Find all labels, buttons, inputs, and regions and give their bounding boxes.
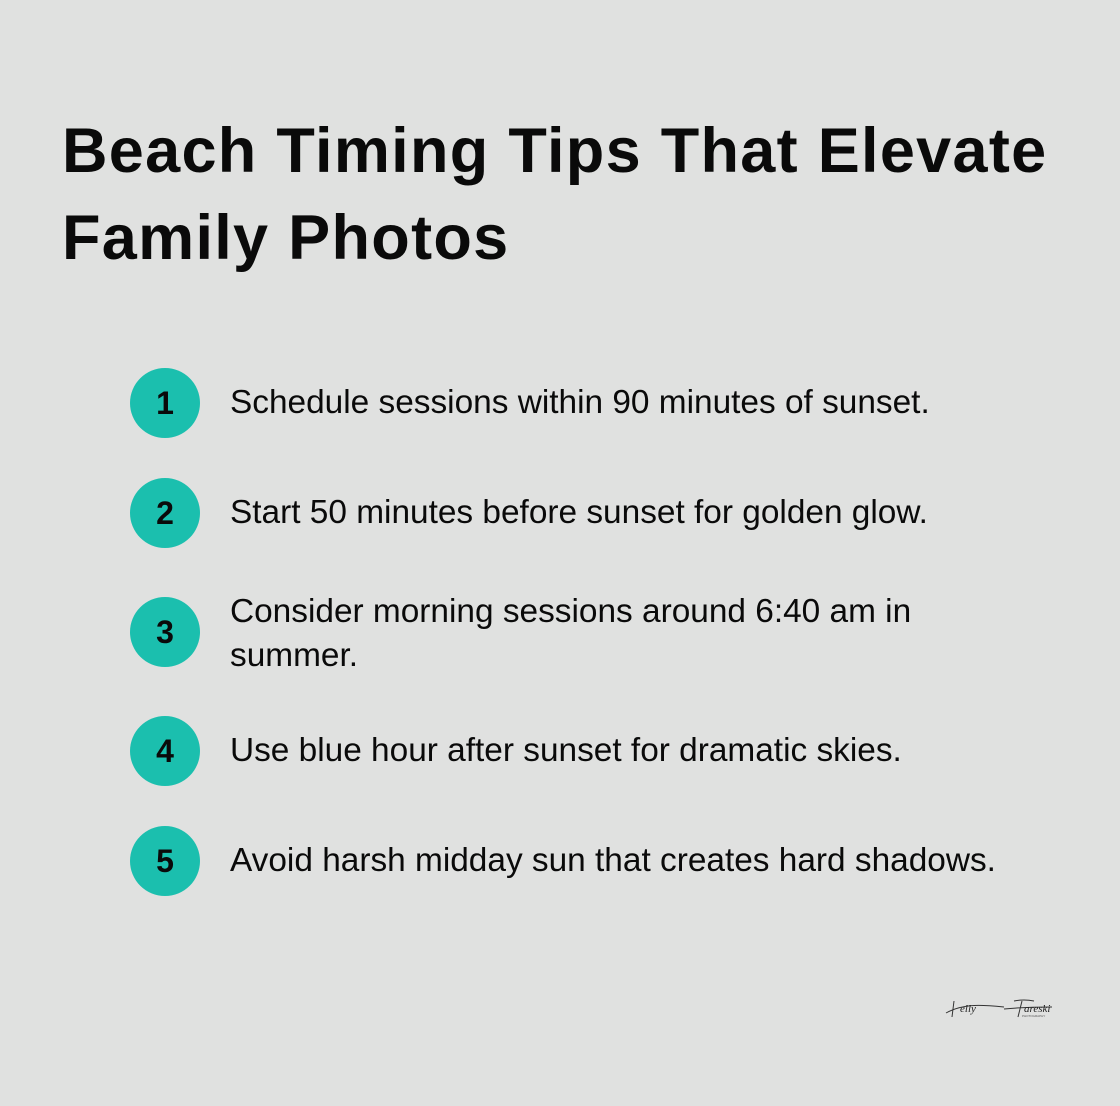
text 3: summer. — [230, 637, 358, 674]
text 2: Start 50 minutes before sunset for golden glow. — [230, 494, 928, 531]
badge 3: 3 — [156, 614, 174, 650]
badge 3 — [130, 597, 200, 667]
text 3: Consider morning sessions around 6:40 am in — [230, 593, 911, 630]
text 5: Avoid harsh midday sun that creates hard shadows. — [230, 842, 996, 879]
badge 5 — [130, 826, 200, 896]
logo signature: areski — [1024, 1003, 1050, 1015]
badge 5: 5 — [156, 843, 174, 879]
text 3 — [230, 593, 911, 674]
title — [62, 116, 1047, 273]
badge 2 — [130, 478, 200, 548]
item 5 — [130, 826, 996, 896]
title: Family Photos — [62, 203, 509, 273]
logo signature — [946, 1000, 1052, 1018]
badge 4: 4 — [156, 733, 174, 769]
badge 1: 1 — [156, 385, 174, 421]
item 3 — [130, 593, 911, 674]
logo signature: PHOTOGRAPHY — [1022, 1014, 1045, 1018]
badge 2: 2 — [156, 495, 174, 531]
text 4: Use blue hour after sunset for dramatic skies. — [230, 732, 902, 769]
item 2 — [130, 478, 928, 548]
badge 4 — [130, 716, 200, 786]
badge 1 — [130, 368, 200, 438]
title: Beach Timing Tips That Elevate — [62, 116, 1047, 186]
logo signature: elly — [960, 1003, 976, 1015]
item 1 — [130, 368, 930, 438]
item 4 — [130, 716, 902, 786]
text 1: Schedule sessions within 90 minutes of sunset. — [230, 384, 930, 421]
